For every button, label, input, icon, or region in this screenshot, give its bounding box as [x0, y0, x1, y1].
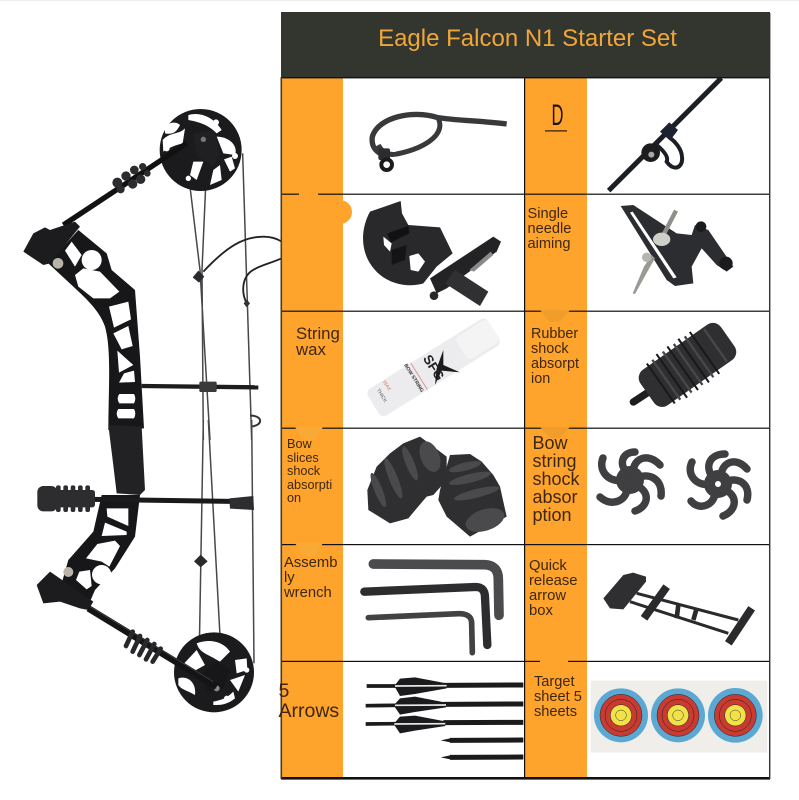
row 3 left: string wax image: SFG — [420, 352, 447, 383]
lower limb pocket — [37, 572, 93, 610]
label: assembly wrench: wrench — [283, 585, 332, 601]
row 2 left: arrow rest image — [363, 201, 501, 306]
strings upper — [186, 153, 282, 440]
upper limb — [63, 143, 187, 225]
target 2 — [651, 688, 705, 742]
row 3 left: string wax image: THICK — [375, 388, 388, 404]
label: assembly wrench: ly — [284, 570, 295, 586]
cable slide — [199, 382, 217, 392]
row 1 left: string tube image — [372, 114, 507, 170]
strings lower — [199, 420, 254, 667]
label: single needle aiming: aiming — [528, 236, 570, 252]
label: quick release arrow box: release — [529, 573, 578, 589]
bow lower half — [37, 420, 254, 712]
label: bow string shock absorption: absor — [532, 487, 578, 507]
row 6 right: target sheet image — [591, 681, 767, 753]
nocking D loop — [250, 416, 260, 427]
row 4 right: string silencer left — [600, 452, 661, 511]
header bar — [281, 12, 770, 77]
row 5 right: quiver image — [603, 573, 752, 643]
label: rubber shock absorption: shock — [531, 341, 569, 357]
lower string peep — [194, 555, 208, 567]
row 1 right: D-loop label — [545, 99, 567, 132]
row 3 right: rubber damper image — [633, 319, 740, 411]
table panel — [278, 12, 770, 780]
stabilizer tip — [229, 496, 254, 510]
cable stop — [244, 299, 250, 307]
row 4 right: string silencer right — [690, 454, 748, 516]
label: rubber shock absorption: absorpt — [531, 356, 579, 372]
row 6 left: arrows image — [366, 677, 523, 760]
row 4 left: limb damper image — [367, 437, 507, 537]
target 3 — [708, 688, 763, 743]
label: bow string shock absorption: Bow — [532, 433, 569, 453]
label: quick release arrow box: arrow — [529, 588, 566, 604]
bottom cam wheel — [174, 632, 254, 712]
label: string wax: wax — [295, 340, 326, 359]
row 1 right: D-loop label: D — [552, 99, 563, 132]
limb silencer lower — [126, 632, 161, 662]
lower riser — [62, 495, 140, 602]
label: target sheet 5 sheets: sheets — [534, 704, 577, 720]
label: 5 arrows: Arrows — [278, 700, 339, 722]
label: single needle aiming: Single — [528, 206, 568, 222]
compound bow — [23, 109, 282, 712]
label: bow slices shock absorption: on — [287, 491, 301, 505]
row 3 left: string wax image — [365, 316, 502, 418]
orange label column right — [525, 78, 587, 778]
label: bow string shock absorption: string — [532, 451, 577, 471]
label: bow string shock absorption: shock — [532, 469, 581, 489]
row 3 left: string wax image: BOW STRING — [402, 363, 425, 394]
upper string peep — [193, 271, 204, 283]
table rules — [280, 13, 770, 780]
limb silencer upper — [112, 163, 151, 193]
label: string wax: String — [296, 324, 340, 343]
row 3 left: string wax image: WAX — [381, 380, 392, 393]
label: bow string shock absorption: ption — [532, 505, 572, 525]
lower limb — [88, 608, 217, 687]
label: bow slices shock absorption: Bow — [287, 437, 313, 451]
label: rubber shock absorption: ion — [531, 371, 550, 387]
label: bow slices shock absorption: absorpti — [287, 478, 332, 492]
title: Eagle Falcon N1 Starter Set — [378, 25, 677, 52]
label: target sheet 5 sheets: Target — [534, 674, 575, 690]
orange patches over rules — [295, 193, 570, 663]
row 2 right: sight image — [621, 205, 733, 294]
label: target sheet 5 sheets: sheet 5 — [534, 689, 582, 705]
target 1 — [594, 688, 648, 742]
bow upper half — [23, 109, 282, 440]
row 5 left: hex wrench image — [364, 564, 499, 653]
top cam wheel — [160, 109, 242, 191]
label: single needle aiming: needle — [528, 221, 571, 237]
cable guard rod — [142, 386, 258, 387]
grip — [108, 425, 145, 495]
upper riser — [48, 230, 144, 430]
label: bow slices shock absorption: slices — [287, 451, 319, 465]
label: bow slices shock absorption: shock — [287, 464, 321, 478]
orange label column left — [282, 78, 343, 778]
stabilizer weight — [37, 485, 95, 512]
label: assembly wrench: Assemb — [284, 555, 337, 571]
label: quick release arrow box: box — [529, 603, 553, 619]
upper limb pocket — [23, 222, 80, 265]
label: 5 arrows: 5 — [278, 680, 290, 702]
stabilizer rod — [93, 499, 231, 501]
label: rubber shock absorption: Rubber — [531, 326, 578, 342]
label: quick release arrow box: Quick — [529, 558, 567, 574]
row 1 right: D-loop image — [609, 78, 721, 191]
